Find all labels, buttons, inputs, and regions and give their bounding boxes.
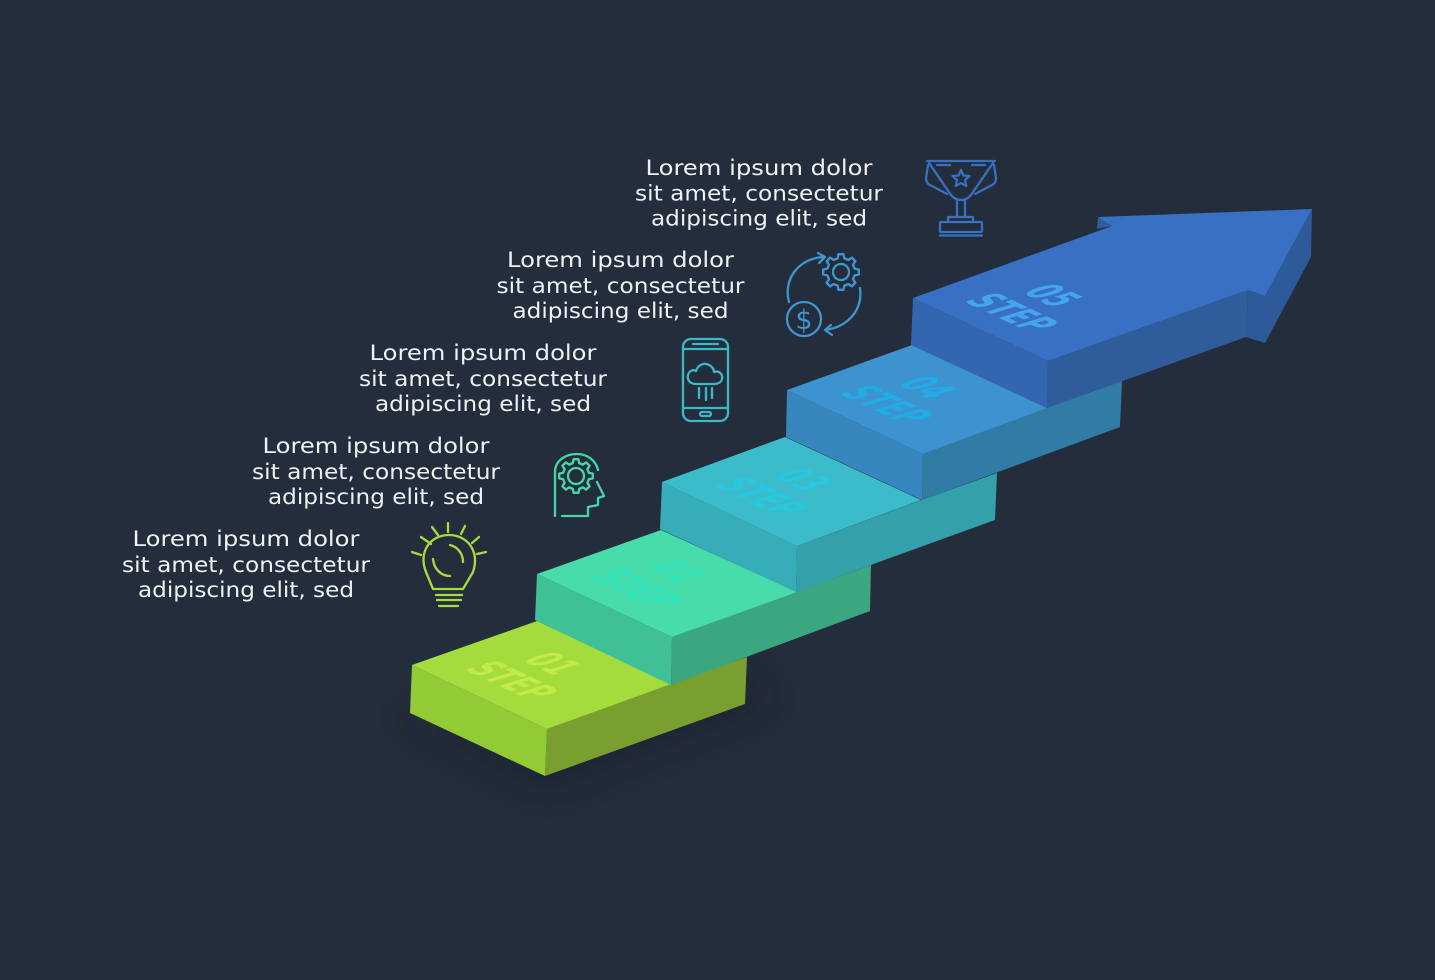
step 02 label: 02 [636,556,719,587]
text block 04: sit amet, consectetur [496,274,745,299]
text block 03: Lorem ipsum dolor [370,341,597,366]
text block 02: adipiscing elit, sed [268,485,484,510]
step 02 label [578,556,719,612]
step 04 label [828,372,969,428]
icon: light bulb [412,523,486,606]
text block 03: adipiscing elit, sed [375,392,591,417]
step 03 label: 03 [761,464,844,495]
icon: money gear cycle: $ [795,305,813,336]
text block 02: sit amet, consectetur [252,460,500,485]
text block 05: adipiscing elit, sed [651,206,867,232]
step 05 label: 05 [1011,280,1094,311]
text block 05 [635,156,883,232]
step 01 label: STEP [453,657,570,704]
step 03 label: STEP [703,473,820,520]
step 03 block [660,437,997,592]
step 03 label [703,464,844,520]
text block 01: adipiscing elit, sed [138,578,354,603]
staircase arrow [410,209,1312,776]
text block 04: adipiscing elit, sed [512,299,728,324]
text block 01: Lorem ipsum dolor [132,527,360,552]
text block 01 [122,527,370,603]
step 05 label [953,280,1094,336]
text block 04 [496,248,745,324]
step 05 arrow block [911,209,1312,408]
step 04 label: STEP [828,381,945,428]
step 04 block [786,345,1122,500]
icon: head with gear [555,454,604,516]
icon: money gear cycle [787,253,860,336]
icon: phone with cloud [683,339,728,421]
step 02 label: STEP [578,565,695,612]
step 01 label [453,648,594,704]
text block 03: sit amet, consectetur [359,367,607,392]
icon: trophy [926,161,996,236]
step 02 block [535,530,871,685]
step 01 label: 01 [511,648,594,679]
step 04 label: 04 [886,372,969,403]
ground shadow [395,670,770,790]
text block 01: sit amet, consectetur [122,553,370,578]
text block 02: Lorem ipsum dolor [262,434,490,459]
text block 02 [252,434,500,510]
text block 03 [359,341,607,417]
step 05 label: STEP [953,289,1070,336]
text block 05: sit amet, consectetur [635,182,883,206]
step 01 block [410,621,747,776]
text block 05: Lorem ipsum dolor [646,156,873,181]
text block 04: Lorem ipsum dolor [507,248,734,273]
